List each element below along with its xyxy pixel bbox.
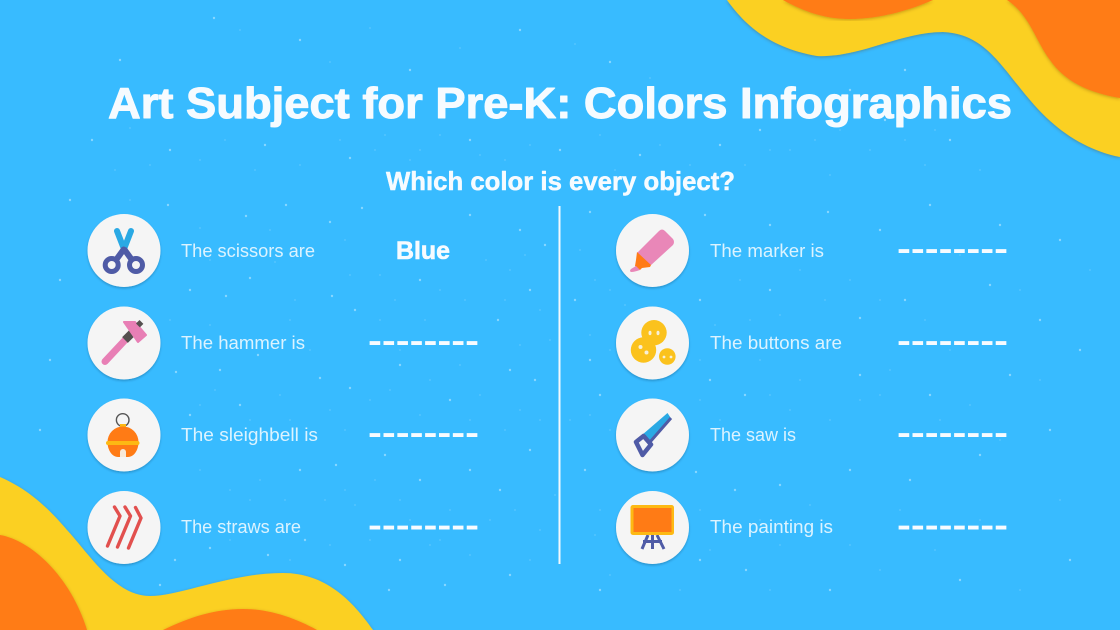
answer blank: -------- — [897, 507, 1008, 543]
row: scissors — [88, 214, 450, 287]
row: hammer — [88, 306, 479, 380]
title: Art Subject for Pre-K: Colors Infographics — [108, 79, 1012, 128]
wave: top right corner — [727, 0, 1120, 157]
label: The saw is — [710, 425, 796, 445]
answer blank: -------- — [368, 414, 479, 450]
icon: saw — [616, 398, 689, 472]
vertical divider — [558, 206, 560, 564]
answer blank: -------- — [368, 507, 479, 543]
row: painting — [616, 491, 1008, 564]
icon: buttons — [616, 306, 689, 380]
subtitle: Which color is every object? — [386, 166, 735, 196]
icon: painting on easel — [616, 491, 689, 564]
label: The sleighbell is — [181, 425, 318, 445]
label: The painting is — [710, 517, 833, 537]
icon: marker — [616, 214, 689, 287]
fine speckle texture — [115, 28, 1090, 590]
row: saw — [616, 398, 1008, 472]
row: buttons — [616, 306, 1008, 380]
label: The buttons are — [710, 333, 842, 353]
icon: sleighbell — [88, 398, 160, 472]
label: The hammer is — [181, 333, 305, 353]
row: sleighbell — [88, 398, 479, 472]
row: straws — [88, 491, 479, 564]
icon: scissors — [88, 214, 160, 287]
answer blank: -------- — [368, 322, 479, 358]
row: marker — [616, 214, 1008, 287]
label: The scissors are — [181, 241, 315, 261]
answer blank: -------- — [897, 414, 1008, 450]
answer blank: -------- — [897, 230, 1008, 266]
label: The straws are — [181, 517, 301, 537]
icon: hammer — [88, 306, 160, 380]
label: The marker is — [710, 241, 824, 261]
answer: Blue: Blue — [396, 237, 450, 265]
wave: bottom left corner — [0, 477, 373, 630]
answer blank: -------- — [897, 322, 1008, 358]
icon: straws — [88, 491, 160, 564]
